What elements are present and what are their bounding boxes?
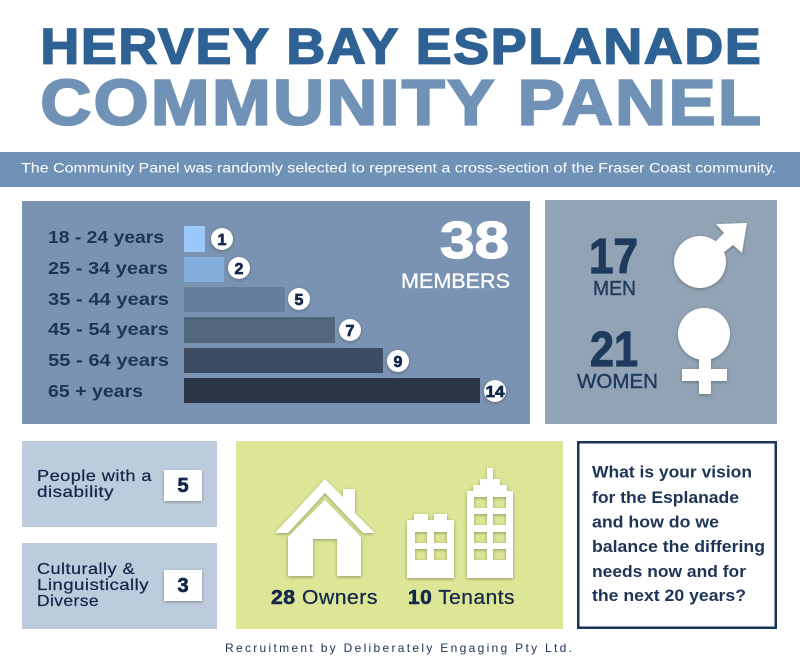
panel: culturally and linguistically diverse [22,543,217,629]
age labels [48,227,169,401]
panel: age bar chart [22,201,530,424]
panel: gender [545,200,777,424]
intro banner [0,152,800,187]
total members: MEMBERS [401,270,510,293]
age labels: 35 - 44 years [48,289,169,309]
men count: MEN [593,278,636,300]
total members: 38 [440,212,509,270]
men count: 17 [589,230,638,284]
icon: house [275,479,375,576]
panel: vision question [578,442,776,628]
panel: vision question: needs now and for [592,562,746,581]
age labels: 45 - 54 years [48,319,169,339]
panel: people with a disability: 5 [177,475,189,497]
owners label: 28 Owners [271,587,378,609]
icon: small apartment building [407,514,454,578]
value badges [211,228,506,402]
title: HERVEY BAY ESPLANADE [40,19,762,75]
age labels: 25 - 34 years [48,258,168,278]
bars [184,226,480,403]
panel: vision question: for the Esplanade [592,488,739,507]
value badges: 14 [486,384,505,401]
panel: people with a disability: People with a [37,468,152,485]
tenants label: 10 Tenants [408,587,515,609]
panel: culturally and linguistically diverse: 3 [177,575,189,597]
panel: people with a disability [22,441,217,527]
age labels: 65 + years [48,381,143,401]
value badges: 1 [218,232,227,249]
title: COMMUNITY PANEL [40,66,764,138]
value badges: 5 [295,292,304,309]
women count: 21 [590,323,638,377]
panel: owners and tenants [236,441,563,629]
title [40,19,764,139]
value badges: 9 [394,354,403,371]
total members [401,212,510,293]
panel: people with a disability: disability [37,484,114,501]
footer credit: Recruitment by Deliberately Engaging Pty Ltd. [225,641,572,655]
age labels: 18 - 24 years [48,227,164,247]
panel: culturally and linguistically diverse: Diverse [37,593,99,610]
panel: vision question: What is your vision [592,462,752,482]
age labels: 55 - 64 years [48,350,169,370]
panel: vision question: and how do we [592,512,719,532]
panel: vision question: the next 20 years? [592,586,746,605]
panel: culturally and linguistically diverse: Culturally & [37,561,135,578]
panel: vision question: balance the differing [592,537,765,556]
women count [577,323,658,393]
icon: tall apartment building [467,468,513,578]
icon: female symbol [678,308,730,394]
value badges: 7 [346,323,355,340]
icon: male symbol [674,223,747,288]
value badges: 2 [235,261,244,278]
intro banner: The Community Panel was randomly selected to represent a cross-section of the Fraser Coast community. [21,160,776,176]
women count: WOMEN [577,371,658,393]
panel: culturally and linguistically diverse: Linguistically [37,577,149,594]
